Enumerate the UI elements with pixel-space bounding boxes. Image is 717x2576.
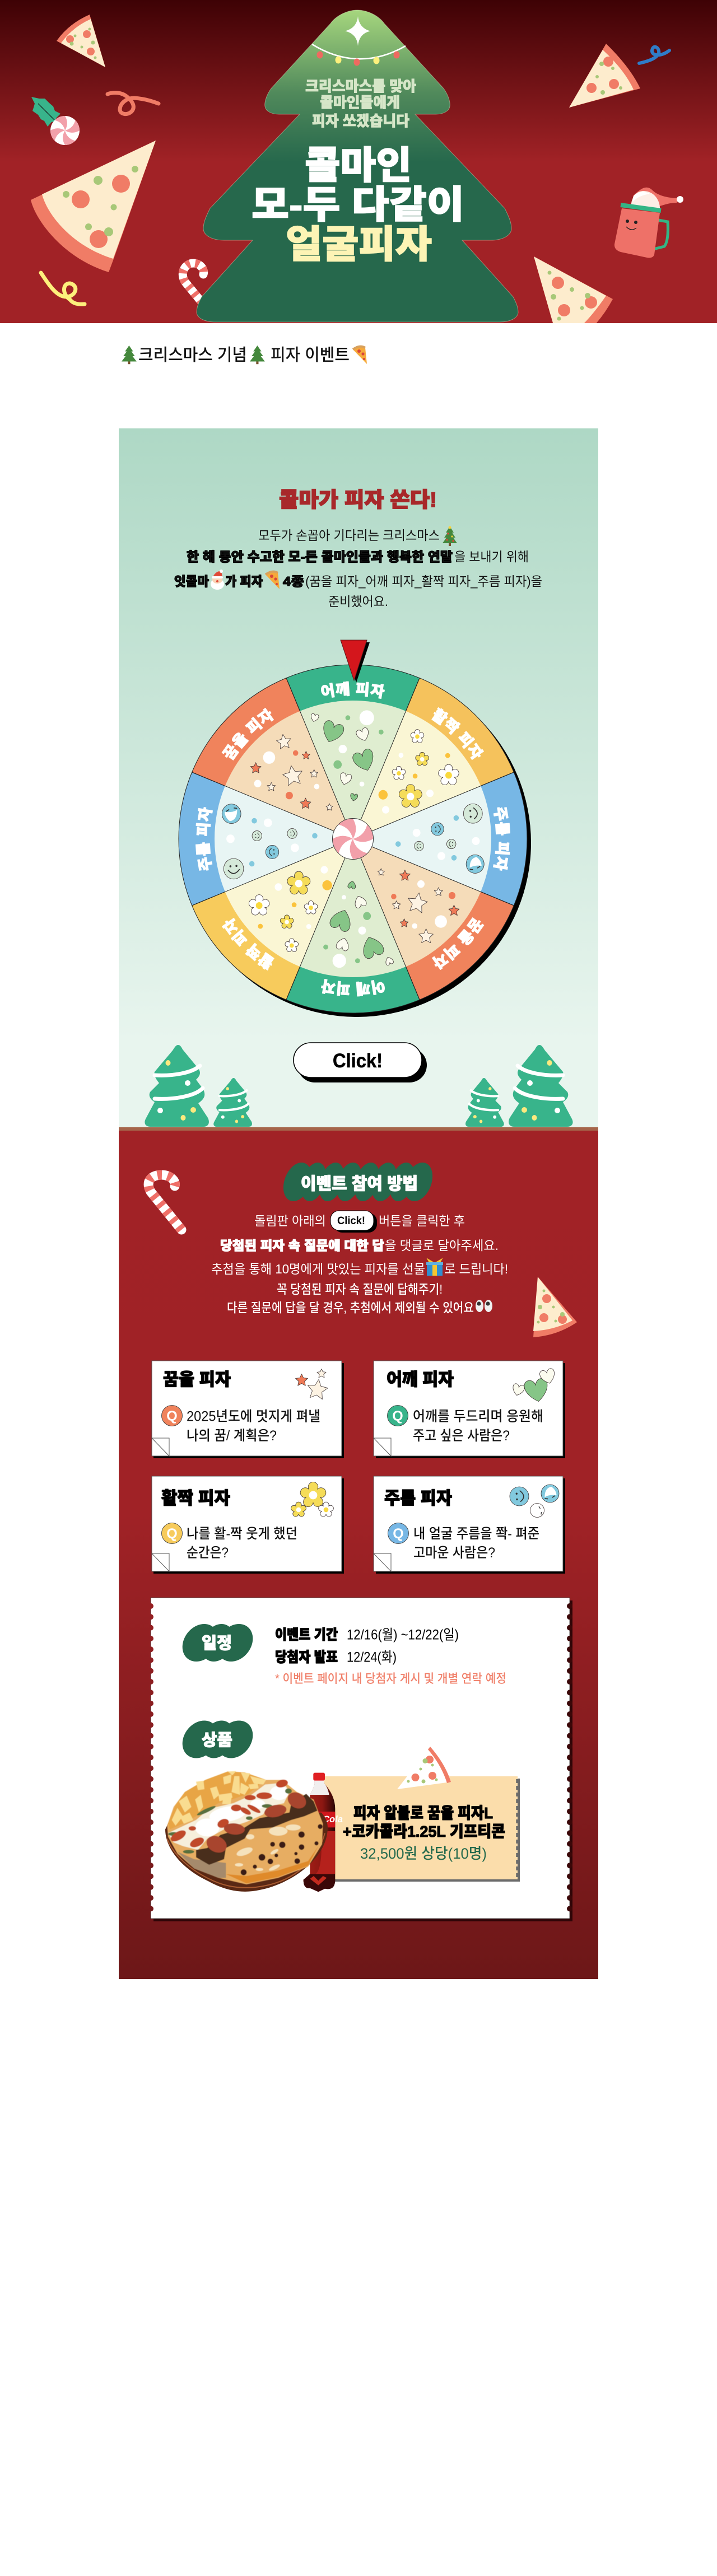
- card: wrinkle pizza: 내 얼굴 주름을 쫙- 펴준: [413, 1526, 539, 1542]
- card: dream pizza: 나의 꿈/ 계획은?: [187, 1428, 277, 1444]
- schedule text: [275, 1627, 506, 1686]
- click button: Click!: [333, 1050, 383, 1072]
- peppermint candy: [50, 116, 80, 145]
- pizza plate: [165, 1813, 328, 1892]
- pizza slice large left: [31, 141, 156, 272]
- decorations: shoulder pizza bottom: [323, 880, 394, 968]
- prize badge: 상품: [202, 1731, 232, 1749]
- card: wrinkle pizza: 고마운 사람은?: [413, 1545, 495, 1561]
- panel mint background: [119, 428, 598, 1127]
- join instructions: 다른 질문에 답을 달 경우, 추첨에서 제외될 수 있어요: [227, 1300, 474, 1315]
- decorations: dream pizza lower right: [378, 869, 459, 943]
- hero banner: [0, 0, 717, 325]
- click button: [294, 1043, 427, 1082]
- join instructions: 당첨된 피자 속 질문에 대한 답: [220, 1238, 384, 1253]
- join instructions: [211, 1211, 508, 1315]
- intro text: 잇콜마: [174, 574, 209, 589]
- prize text: [343, 1804, 505, 1862]
- wheel labels: 주름 피자: [195, 807, 213, 871]
- join heading banner: 이벤트 참여 방법: [301, 1175, 418, 1193]
- ground line: [119, 1127, 598, 1131]
- card: smile pizza: 활짝 피자: [161, 1488, 230, 1508]
- intro text: 준비했어요.: [328, 594, 388, 609]
- tree star: [345, 16, 370, 46]
- wheel pointer: [341, 640, 370, 683]
- wheel labels: 주름 피자: [493, 807, 510, 871]
- card: dream pizza: 꿈을 피자: [163, 1370, 231, 1389]
- card: dream pizza: [152, 1361, 344, 1458]
- prize tag: [324, 1776, 520, 1882]
- hero title: 얼굴피자: [286, 223, 432, 266]
- tree small left: [213, 1078, 252, 1127]
- string of lights: [312, 44, 406, 66]
- hero subtitle: 크리스마스를 맞아: [305, 78, 416, 95]
- panel: how to join: [119, 1131, 598, 1979]
- card: shoulder pizza: Q: [392, 1408, 403, 1424]
- page heading line: 피자 이벤트: [271, 346, 350, 365]
- squiggle red: [108, 92, 159, 114]
- wheel labels: [195, 681, 510, 997]
- wheel labels: 활짝 피자: [222, 918, 274, 970]
- wheel labels: 꿈을 피자: [432, 917, 484, 970]
- hero title: [252, 144, 464, 266]
- prize text: +코카콜라1.25L 기프티콘: [343, 1823, 505, 1840]
- schedule badge: 일정: [202, 1634, 232, 1653]
- card: smile pizza: 순간은?: [187, 1545, 229, 1561]
- decorations: dream pizza upper left: [250, 734, 333, 810]
- icon: gift: [426, 1259, 443, 1276]
- join instructions: 추첨을 통해 10명에게 맛있는 피자를 선물: [211, 1262, 425, 1276]
- squiggle yellow: [41, 273, 85, 304]
- join heading banner: [280, 1163, 436, 1201]
- join instructions: 돌림판 아래의: [254, 1214, 326, 1228]
- cola bottle: [304, 1773, 343, 1892]
- page heading line: 크리스마스 기념: [138, 346, 247, 365]
- holly leaf: [31, 97, 60, 127]
- hero title: 콜마인: [305, 144, 412, 187]
- decorations: shoulder pizza top: [310, 710, 384, 801]
- schedule text: 이벤트 기간: [275, 1627, 338, 1643]
- pizza photo: [165, 1771, 328, 1892]
- cola bottle: Cola: [323, 1814, 343, 1824]
- right perforation: [567, 1606, 572, 1912]
- ticket paper: [151, 1598, 570, 1919]
- wheel labels: 활짝 피자: [431, 707, 484, 760]
- schedule badge: [179, 1624, 257, 1662]
- pizza toppings: [167, 1771, 323, 1884]
- panel heading: 콜마가 피자 쏜다!: [279, 488, 437, 511]
- card: shoulder pizza: 어깨를 두드리며 응원해: [413, 1409, 543, 1425]
- card: smile pizza: [152, 1476, 344, 1574]
- wheel shadow: [183, 669, 531, 1017]
- christmas tree shape: [197, 10, 518, 322]
- inline click button: Click!: [337, 1215, 365, 1227]
- infographic page: [0, 0, 717, 1979]
- hero decorations: [31, 15, 683, 325]
- inline click button: [330, 1211, 377, 1233]
- hero subtitle: 콜마인들에게: [320, 94, 400, 111]
- roulette wheel: [178, 664, 531, 1017]
- pizza slice bottom right: [534, 256, 613, 325]
- intro text: 을 보내기 위해: [454, 549, 529, 564]
- schedule text: 12/16(월) ~12/22(일): [347, 1627, 459, 1643]
- red panel background: [119, 1131, 598, 1979]
- join instructions: 로 드립니다!: [444, 1262, 508, 1276]
- card: smile pizza: Q: [166, 1526, 178, 1542]
- page heading line: [122, 346, 367, 365]
- left perforation: [148, 1606, 153, 1912]
- candy cane hero: [183, 263, 208, 310]
- decorations: wrinkle pizza right: [395, 804, 484, 873]
- pizza slice top right: [569, 44, 640, 108]
- wheel decorations: [222, 710, 484, 968]
- prize text: 32,500원 상당(10명): [360, 1845, 487, 1862]
- wheel labels: 어깨 피자: [321, 681, 385, 699]
- join instructions: 을 댓글로 달아주세요.: [385, 1238, 499, 1253]
- hero red gradient background: [0, 0, 717, 323]
- pizza slice top left: [57, 15, 105, 67]
- card: wrinkle pizza: Q: [393, 1526, 404, 1542]
- wheel labels: 어깨 피자: [321, 979, 385, 997]
- intro text: 가 피자: [225, 574, 263, 589]
- card: wrinkle pizza: [374, 1476, 565, 1574]
- intro text: 4종: [283, 574, 304, 589]
- card: dream pizza: Q: [166, 1408, 178, 1424]
- decorations: smile pizza upper right: [379, 730, 459, 814]
- decorations: wrinkle pizza left: [222, 804, 318, 879]
- intro text: 한 해 동안 수고한 모-든 콜마인들과 행복한 연말: [187, 549, 453, 564]
- join instructions: 꼭 당첨된 피자 속 질문에 답해주기!: [277, 1282, 443, 1296]
- candy cane: [148, 1175, 181, 1230]
- hero subtitle: [305, 78, 416, 129]
- intro text: (꿈을 피자_어깨 피자_활짝 피자_주름 피자)을: [305, 574, 542, 589]
- schedule text: 당첨자 발표: [275, 1650, 338, 1665]
- tree small right: [465, 1078, 504, 1127]
- wheel outer sectors: [179, 665, 527, 1013]
- card: smile pizza: 나를 활-짝 웃게 했던: [187, 1526, 297, 1542]
- pizza slice panel: [533, 1277, 577, 1337]
- card: shoulder pizza: 주고 싶은 사람은?: [413, 1428, 510, 1444]
- card: wrinkle pizza: 주름 피자: [384, 1488, 452, 1508]
- decorations: smile pizza lower left: [249, 866, 332, 952]
- wheel center candy: [333, 819, 373, 859]
- prize pizza slice: [397, 1747, 451, 1789]
- hero subtitle: 피자 쏘겠습니다: [312, 113, 409, 129]
- schedule text: 12/24(화): [347, 1650, 397, 1665]
- tree large right: [509, 1045, 573, 1127]
- ticket: schedule and prize: [151, 1598, 572, 1921]
- prize badge: [179, 1720, 257, 1758]
- ticket shadow: [153, 1600, 572, 1921]
- wheel inner sectors: [192, 678, 514, 1000]
- christmas mug: [614, 188, 683, 258]
- join instructions: 버튼을 클릭한 후: [379, 1214, 465, 1228]
- schedule text: * 이벤트 페이지 내 당첨자 게시 및 개별 연락 예정: [275, 1672, 506, 1686]
- icon: eyes: [476, 1300, 492, 1312]
- hero title: 모-두 다같이: [252, 184, 464, 226]
- card: shoulder pizza: [374, 1361, 565, 1458]
- intro text: [174, 526, 542, 609]
- wheel labels: 꿈을 피자: [222, 708, 274, 760]
- panel: roulette: [119, 428, 598, 1127]
- squiggle blue: [639, 47, 669, 63]
- prize text: 피자 알볼로 꿈을 피자L: [353, 1804, 493, 1822]
- card: shoulder pizza: 어깨 피자: [387, 1370, 454, 1389]
- card: dream pizza: 2025년도에 멋지게 펴낼: [187, 1409, 320, 1425]
- tree large left: [145, 1045, 209, 1127]
- intro text: 모두가 손꼽아 기다리는 크리스마스: [258, 528, 440, 543]
